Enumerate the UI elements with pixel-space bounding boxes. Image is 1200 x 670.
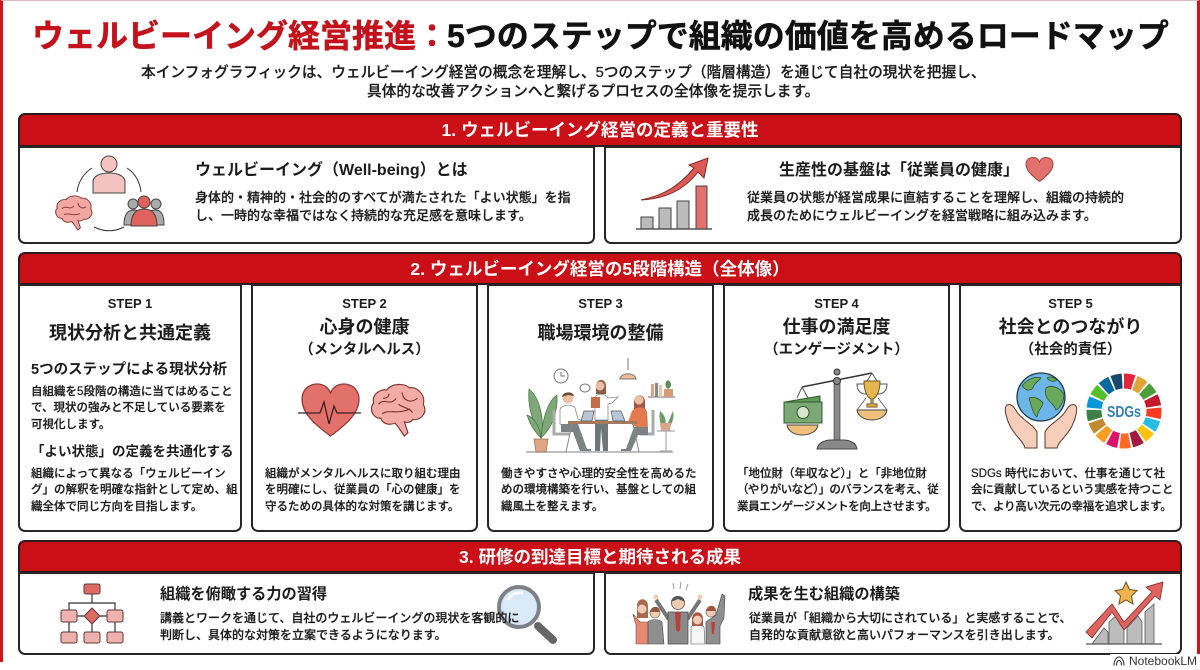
- step 4 text: [737, 466, 938, 513]
- text: overview skill: 講義とワークを通じて、自社のウェルビーイングの現状を客観的に: [160, 611, 519, 625]
- heading: well-being: ウェルビーイング（Well-being）とは: [195, 162, 468, 179]
- step 5 text: で、より高い次元の幸福を追求します。: [971, 501, 1172, 513]
- heading: productive organisation: 成果を生む組織の構築: [748, 586, 900, 603]
- section 3 heading: [18, 540, 1182, 573]
- panel: step 1: [18, 284, 242, 532]
- icon: heart and brain: [298, 383, 426, 437]
- step 1 title: 現状分析と共通定義: [49, 323, 211, 343]
- section 2 heading: 2. ウェルビーイング経営の5段階構造（全体像）: [410, 259, 790, 279]
- step 4 subtitle: （エンゲージメント）: [764, 342, 909, 358]
- step 3 title: 職場環境の整備: [538, 323, 664, 343]
- step 1 text a: [31, 384, 233, 431]
- text: well-being definition: 身体的・精神的・社会的のすべてが満たされた「よい状態」を指: [195, 190, 571, 205]
- step 2 subtitle: （メンタルヘルス）: [299, 342, 430, 358]
- text: productivity explanation: 従業員の状態が経営成果に直結することを理解し、組織の持続的: [747, 190, 1124, 205]
- step 5 label: STEP 5: [1048, 296, 1093, 311]
- icon: hands holding globe: [1004, 372, 1078, 448]
- icon: flowchart: [60, 584, 124, 644]
- panel: step 5: [959, 284, 1182, 532]
- panel: productivity foundation: [604, 146, 1182, 244]
- step 2 text: 組織がメンタルヘルスに取り組む理由: [265, 468, 460, 480]
- step 3 text: めの環境構築を行い、基盤としての組: [501, 484, 696, 496]
- watermark: NotebookLM: [1110, 654, 1200, 670]
- step 1 subheading a: 5つのステップによる現状分析: [31, 362, 227, 378]
- step 3 text: 織風土を整えます。: [501, 501, 603, 513]
- icon: NotebookLM mark: [1113, 656, 1125, 666]
- panel: step 4: [723, 284, 950, 532]
- step 1 subheading b: 「よい状態」の定義を共通化する: [31, 444, 234, 459]
- section 1 heading: [18, 113, 1182, 147]
- step 1 text b: 組織によって異なる「ウェルビーイン: [31, 468, 226, 480]
- panel: building a productive organisation: [604, 572, 1182, 655]
- text: productive organisation: 従業員が「組織から大切にされている」と実感することで、: [749, 611, 1072, 625]
- title: [32, 18, 1169, 54]
- section 2: five-stage structure: [18, 252, 1182, 532]
- illustration: team at office table: [526, 358, 675, 453]
- step 4 label: STEP 4: [814, 296, 859, 311]
- text: overview skill: [160, 611, 519, 642]
- step 3 label: STEP 3: [578, 296, 623, 311]
- step 1 text b: 織全体で同じ方向を目指します。: [31, 501, 202, 513]
- icon: SDGs wheel: [1086, 374, 1162, 448]
- step 2 text: [265, 466, 460, 513]
- icon: balance scale with money and trophy: [784, 368, 888, 450]
- heading: overview skill: 組織を俯瞰する力の習得: [160, 586, 327, 603]
- section 2 heading: [18, 252, 1182, 285]
- section 1 heading: 1. ウェルビーイング経営の定義と重要性: [442, 120, 758, 140]
- intro text: 本インフォグラフィックは、ウェルビーイング経営の概念を理解し、5つのステップ（階層構造）を通じて自社の現状を把握し、: [141, 65, 986, 81]
- step 1 text a: で、現状の強みと不足している要素を: [31, 402, 226, 414]
- intro text: [141, 64, 986, 100]
- section 3 heading: 3. 研修の到達目標と期待される成果: [459, 547, 741, 567]
- step 2 label: STEP 2: [342, 296, 387, 311]
- step 4 title: 仕事の満足度: [782, 317, 890, 337]
- icon: SDGs wheel: SDGs: [1107, 404, 1141, 421]
- icon: rising bar chart: [636, 157, 712, 230]
- icon: growth arrow with star: [1086, 581, 1164, 645]
- section 1: definition and importance: [18, 113, 1182, 244]
- step 4 text: 「地位財（年収など）」と「非地位財: [737, 468, 927, 480]
- step 1 text b: [31, 466, 238, 513]
- step 2 text: 守るための具体的な対策を講じます。: [265, 501, 459, 513]
- step 4 text: 業員エンゲージメントを向上させます。: [737, 501, 936, 513]
- text: productive organisation: 自発的な貢献意欲と高いパフォーマンスを引き出します。: [749, 628, 1060, 642]
- step 5 text: [971, 467, 1173, 513]
- step 1 label: STEP 1: [108, 296, 152, 311]
- heading: productivity foundation: 生産性の基盤は「従業員の健康」: [779, 162, 1019, 179]
- icon: magnifying glass: [497, 585, 557, 644]
- text: well-being definition: [195, 190, 571, 223]
- section 3: goals and outcomes: [18, 540, 1182, 655]
- illustration: cheering team: [632, 582, 726, 644]
- text: productivity explanation: 成長のためにウェルビーイングを経営戦略に組み込みます。: [747, 208, 1097, 223]
- text: overview skill: 判断し、具体的な対策を立案できるようになります。: [160, 628, 447, 642]
- step 5 title: 社会とのつながり: [999, 317, 1142, 337]
- panel: step 3: [487, 284, 714, 532]
- panel: step 2: [251, 284, 478, 532]
- step 3 text: 働きやすさや心理的安全性を高めるた: [501, 468, 696, 480]
- step 2 title: 心身の健康: [320, 317, 410, 337]
- step 1 text a: 自組織を5段階の構造に当てはめること: [31, 386, 233, 398]
- step 2 text: を明確にし、従業員の「心の健康」を: [265, 484, 460, 496]
- step 5 subtitle: （社会的責任）: [1020, 342, 1121, 358]
- icon: heart: [1026, 157, 1054, 182]
- step 4 text: （やりがいなど）」のバランスを考え、従: [737, 484, 938, 496]
- step 5 text: 会に貢献しているという実感を持つこと: [971, 484, 1173, 496]
- text: productive organisation: [749, 611, 1072, 642]
- step 3 text: [501, 467, 696, 513]
- panel: what is well-being: [18, 146, 595, 244]
- text: well-being definition: し、一時的な幸福ではなく持続的な充足感を意味します。: [195, 208, 532, 223]
- watermark: NotebookLM: NotebookLM: [1129, 654, 1197, 668]
- step 1 text b: グ」の解釈を明確な指針として定め、組: [31, 484, 238, 496]
- icon: body, mind, social circle: [55, 156, 164, 232]
- step 5 text: SDGs 時代において、仕事を通じて社: [971, 468, 1165, 480]
- intro text: 具体的な改善アクションへと繋げるプロセスの全体像を提示します。: [367, 84, 819, 100]
- text: productivity explanation: [747, 190, 1124, 223]
- title: ウェルビーイング経営推進：: [32, 18, 448, 54]
- panel: organisational overview skill: [18, 572, 595, 655]
- step 1 text a: 可視化します。: [31, 419, 110, 431]
- title: 5つのステップで組織の価値を高めるロードマップ: [447, 18, 1169, 54]
